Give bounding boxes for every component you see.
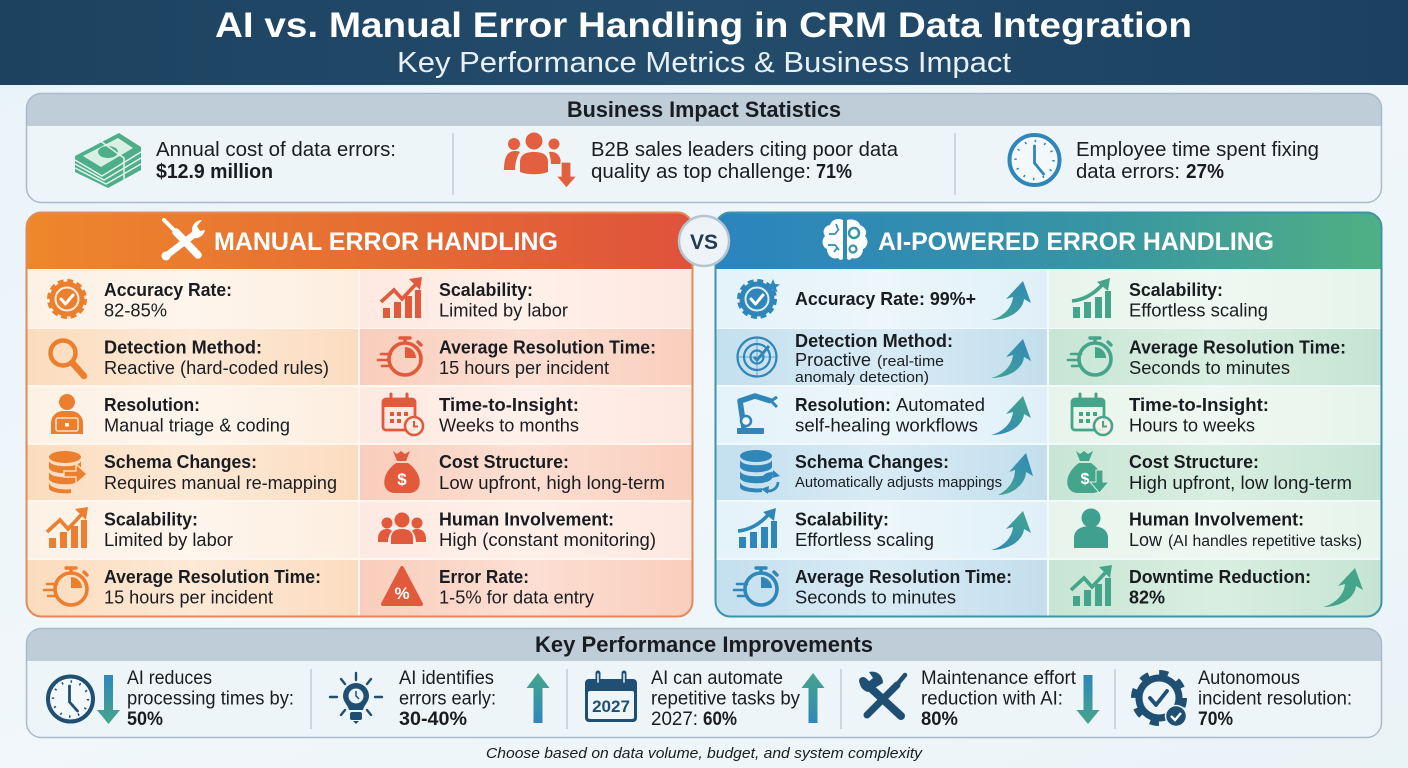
footer note: Choose based on data volume, budget, and system complexity [486,745,924,762]
arrow: improvement [998,453,1033,495]
metric: average resolution time: Average Resolution Time: [795,567,1012,587]
metric: downtime reduction: 82% [1129,588,1165,608]
item: automate tasks: 2027: [651,709,698,730]
item: errors early [330,668,550,730]
metric: error rate: % [394,584,410,603]
metric: scalability [47,507,233,550]
metric: human involvement: Human Involvement: [439,510,614,530]
metric: accuracy rate [738,279,976,318]
metric: average resolution time [44,567,321,608]
metric: detection method: Detection Method: [795,331,953,351]
item: processing times: 50% [127,709,163,730]
metric: average resolution time [378,338,656,378]
item: autonomous resolution: 70% [1198,709,1233,730]
text: employee time: Employee time spent fixing [1076,139,1319,161]
metric: average resolution time [734,567,1012,608]
metric: average resolution time: Average Resolution Time: [1129,338,1346,358]
metric: downtime reduction: Downtime Reduction: [1129,567,1311,587]
panel: key performance improvements [26,628,1382,738]
item: maintenance effort [859,668,1100,730]
metric: human involvement: (AI handles repetitive tasks) [1168,533,1362,550]
metric: human involvement [378,510,656,550]
panel: business impact statistics [26,93,1382,203]
heading: manual error handling: MANUAL ERROR HANDLING [214,228,558,256]
metric: error rate: Error Rate: [439,567,529,587]
text: B2B sales leaders: 71% [816,161,852,183]
metric: scalability: Scalability: [104,510,198,530]
metric: resolution: Manual triage & coding [104,416,290,436]
arrow: improvement [1323,568,1363,607]
metric: cost structure [1067,451,1352,493]
metric: time-to-insight: Time-to-Insight: [1129,395,1269,415]
metric: scalability: Limited by labor [439,300,568,320]
item: automate tasks: repetitive tasks by [651,688,800,710]
metric: time-to-insight: Weeks to months [439,416,579,436]
metric: scalability [738,508,934,550]
item: errors early: errors early: [399,688,496,710]
metric: cost structure: Cost Structure: [1129,452,1259,472]
badge: VS: VS [690,231,718,254]
metric: scalability: Scalability: [795,510,889,530]
heading: AI-powered error handling: AI-POWERED ERROR HANDLING [878,228,1274,256]
item: errors early: AI identifies [399,668,494,689]
text: employee time: 27% [1186,161,1224,183]
metric: scalability: Effortless scaling [795,530,934,550]
item: processing times: AI reduces [127,668,212,689]
metric: detection method: Detection Method: [104,338,262,358]
metric: human involvement [1074,508,1362,550]
icon: clock [1010,135,1060,185]
item: autonomous resolution: Autonomous [1198,668,1300,689]
arrow: improvement [991,396,1031,435]
metric: human involvement: High (constant monitoring) [439,530,656,550]
metric: schema changes: Schema Changes: [104,452,257,472]
badge: VS [679,216,729,266]
item: errors early: 30-40% [399,709,467,730]
metric: cost structure: $ [1081,471,1090,488]
arrow: improvement [991,339,1031,378]
metric: resolution [737,395,985,436]
heading: key performance improvements: Key Performance Improvements [535,632,873,657]
item: automate tasks: AI can automate [651,668,783,689]
metric: detection method [50,338,329,378]
metric: time-to-insight: Hours to weeks [1129,416,1255,436]
metric: average resolution time: Seconds to minutes [795,588,956,608]
metric: downtime reduction [1071,565,1311,608]
text: B2B sales leaders: B2B sales leaders citing poor data [591,139,899,161]
metric: detection method: Reactive (hard-coded rules) [104,358,329,378]
metric: schema changes: Schema Changes: [795,452,949,472]
metric: scalability [381,277,568,320]
text: B2B sales leaders: quality as top challenge: [591,161,811,183]
metric: cost structure: $ [397,470,407,489]
metric: cost structure: Cost Structure: [439,452,569,472]
metric: detection method [738,331,953,386]
metric: schema changes [740,450,1002,494]
item: automate tasks: 2027 [592,697,630,716]
metric: scalability [1072,278,1268,320]
item: processing times: processing times by: [127,688,294,710]
metric: accuracy rate: Accuracy Rate: [104,280,232,300]
icon: brain with gears [823,219,867,260]
item: maintenance effort: 80% [921,709,958,730]
text: annual cost: Annual cost of data errors: [156,139,396,161]
panel: manual error handling [26,212,693,617]
metric: cost structure [384,451,665,493]
metric: error rate: 1-5% for data entry [439,588,594,608]
metric: resolution: self-healing workflows [795,416,978,436]
metric: resolution: Resolution: [795,395,891,415]
text: annual cost [156,139,396,183]
subtitle: Key Performance Metrics & Business Impact [397,47,1011,79]
metric: resolution: Resolution: [104,395,200,415]
item: maintenance effort: reduction with AI: [921,688,1063,710]
metric: average resolution time [1068,338,1346,378]
metric: time-to-insight [383,394,579,436]
item: autonomous resolution: incident resolution: [1198,688,1352,710]
metric: scalability: Scalability: [439,280,533,300]
text: annual cost: $12.9 million [156,161,273,183]
metric: accuracy rate: 82-85% [104,300,167,320]
metric: cost structure: Low upfront, high long-term [439,473,665,493]
metric: resolution: Automated [896,395,985,415]
icon: crossed wrench and screwdriver [162,220,205,260]
metric: average resolution time: Seconds to minutes [1129,358,1290,378]
metric: scalability: Limited by labor [104,530,233,550]
metric: schema changes: Requires manual re-mapping [104,473,337,493]
arrow: improvement [991,511,1031,550]
metric: accuracy rate: Accuracy Rate: 99%+ [795,289,976,309]
item: maintenance effort: Maintenance effort [921,668,1077,689]
metric: human involvement: Human Involvement: [1129,510,1304,530]
item: autonomous resolution [1134,668,1352,730]
item: automate tasks: 60% [703,709,737,730]
metric: scalability: Effortless scaling [1129,300,1268,320]
metric: schema changes: Automatically adjusts mappings [795,475,1002,491]
title: AI vs. Manual Error Handling in CRM Data Integration [215,6,1192,45]
metric: average resolution time: Average Resolution Time: [104,567,321,587]
metric: cost structure: High upfront, low long-term [1129,473,1352,493]
metric: average resolution time: Average Resolution Time: [439,338,656,358]
text: employee time [1076,139,1319,183]
metric: scalability: Scalability: [1129,280,1223,300]
metric: average resolution time: 15 hours per incident [104,588,273,608]
icon: people with down arrow [504,132,577,188]
metric: detection method: (real-time [877,354,944,370]
metric: human involvement: Low [1129,530,1163,550]
metric: error rate [383,567,594,608]
metric: time-to-insight [1072,394,1269,436]
metric: detection method: Proactive [795,350,871,370]
metric: resolution [51,394,290,436]
icon: cash stack [75,133,141,188]
text: B2B sales leaders [591,139,899,183]
metric: time-to-insight: Time-to-Insight: [439,395,579,415]
panel: AI-powered error handling [715,212,1382,617]
arrow: improvement [991,281,1031,320]
metric: accuracy rate [48,280,232,320]
metric: schema changes [49,451,337,493]
item: automate tasks [585,668,824,730]
text: employee time: data errors: [1076,161,1180,183]
metric: average resolution time: 15 hours per incident [439,358,609,378]
header banner [0,0,1408,85]
metric: detection method: anomaly detection) [795,370,929,386]
heading: business impact statistics: Business Impact Statistics [567,97,841,122]
item: processing times [48,668,294,730]
